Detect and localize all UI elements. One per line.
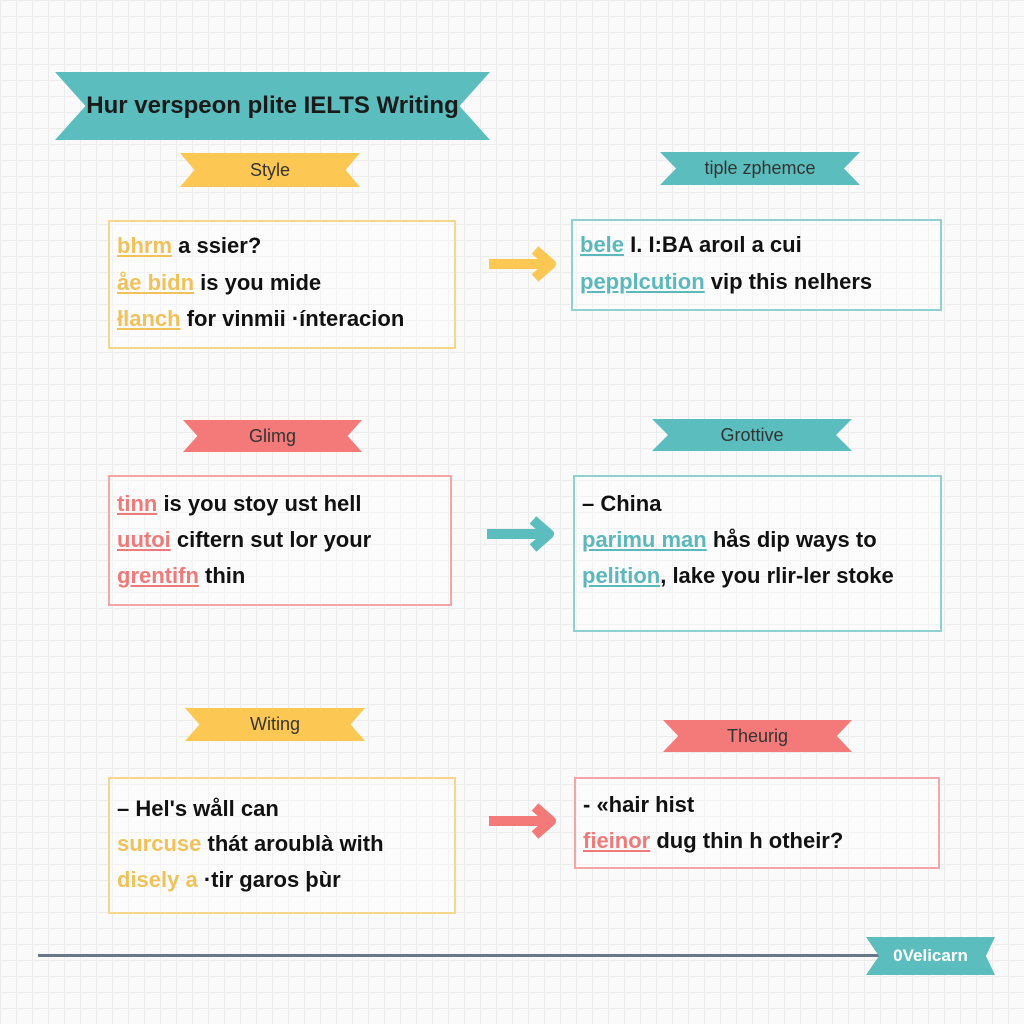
panel: style box: łlanch for vinmii ·ínteracion — [117, 306, 404, 331]
panel: glimg box: uutoi ciftern sut lor your — [117, 527, 371, 552]
footer ribbon — [866, 937, 995, 975]
panel: glimg box: grentifn thin — [117, 563, 245, 588]
ribbon: Grottive — [652, 419, 852, 451]
panel: style box — [108, 220, 456, 349]
panel: grottive box: pelition, lake you rlir-ler stoke — [582, 563, 894, 588]
ribbon: Grottive: Grottive — [720, 424, 784, 444]
panel: style box: bhrm a ssier? — [117, 233, 261, 258]
ribbon: tiple — [660, 152, 860, 185]
title ribbon — [55, 72, 490, 140]
panel: theurig box — [574, 777, 940, 869]
panel: grottive box — [573, 475, 942, 632]
arrow: yellow — [489, 246, 556, 282]
panel: theurig box: - «hair hist — [583, 792, 694, 817]
ribbon: Witing: Witing — [250, 714, 300, 734]
ribbon: Glimg — [183, 420, 362, 452]
panel: grottive box: – China — [582, 491, 661, 516]
panel: right box 1 — [571, 219, 942, 311]
title ribbon: Hur verspeon plite IELTS Writing — [86, 92, 459, 119]
arrow: coral — [489, 803, 556, 839]
ribbon: Glimg: Glimg — [249, 426, 296, 446]
panel: right box 1: pepplcution vip this nelhers — [580, 269, 872, 294]
panel: theurig box: fieinor dug thin h otheir? — [583, 828, 843, 853]
panel: style box: åe bidn is you mide — [117, 270, 321, 295]
panel: witing box — [108, 777, 456, 914]
footer line — [38, 954, 883, 957]
panel: glimg box: tinn is you stoy ust hell — [117, 491, 361, 516]
panel: witing box: surcuse thát aroublà with — [117, 831, 384, 856]
panel: witing box: – Hel's wåll can — [117, 796, 279, 821]
footer ribbon: 0Velicarn — [893, 946, 968, 965]
ribbon: Style — [180, 153, 360, 187]
arrow: teal — [487, 516, 554, 552]
ribbon: Witing — [185, 708, 365, 741]
panel: witing box: disely a ·tir garos þùr — [117, 867, 341, 892]
panel: grottive box: parimu man hås dip ways to — [582, 527, 877, 552]
panel: right box 1: bele I. I:BA aroıl a cui — [580, 232, 802, 257]
panel: glimg box — [108, 475, 452, 606]
ribbon: Theurig — [663, 720, 852, 752]
ribbon: Theurig: Theurig — [727, 726, 788, 746]
ribbon: tiple: tiple zphemce — [704, 158, 816, 178]
ribbon: Style: Style — [250, 160, 290, 180]
